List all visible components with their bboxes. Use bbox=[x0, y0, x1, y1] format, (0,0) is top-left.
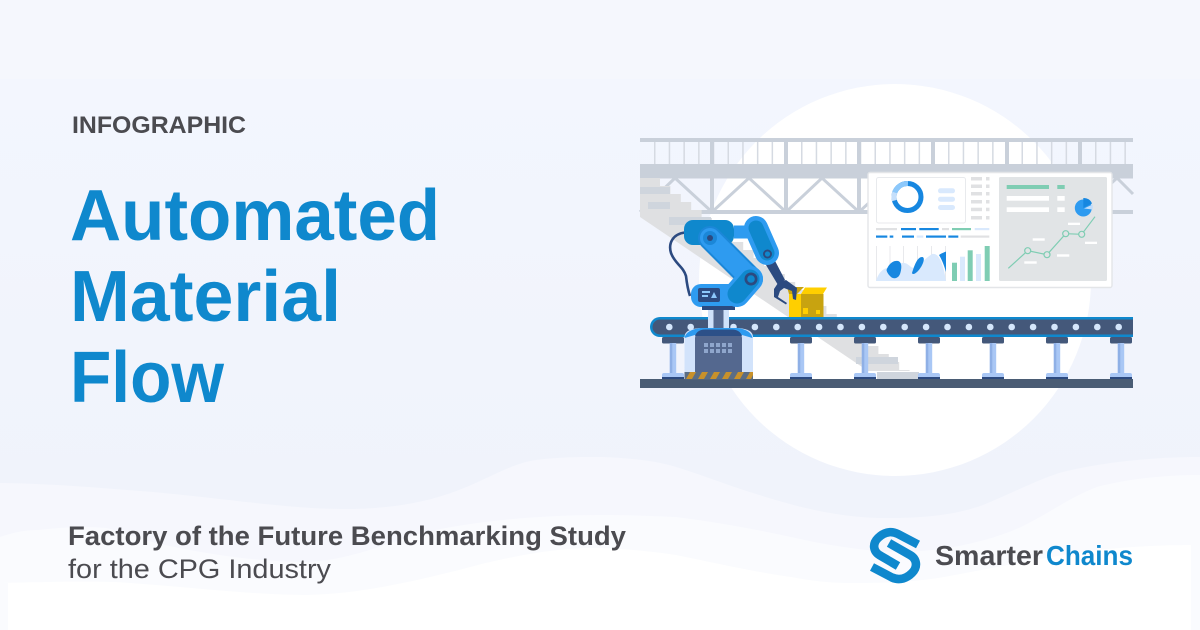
logo icon bbox=[872, 532, 918, 579]
title: Material bbox=[70, 257, 341, 337]
logo wordmark bbox=[935, 540, 1133, 571]
grey analytics panel bbox=[999, 177, 1107, 281]
donut card bbox=[876, 178, 966, 223]
conveyor legs bbox=[662, 337, 1132, 380]
shoulder bbox=[684, 220, 734, 245]
upper arm bbox=[703, 231, 751, 279]
title: Flow bbox=[70, 338, 225, 418]
beam bbox=[734, 226, 759, 238]
white circle behind illustration bbox=[699, 84, 1091, 476]
side list bbox=[971, 177, 990, 220]
title bbox=[70, 176, 440, 418]
title: Automated bbox=[70, 176, 440, 256]
label: infographic: INFOGRAPHIC bbox=[72, 112, 246, 139]
gripper bbox=[763, 257, 797, 304]
logo wordmark: Chains bbox=[1046, 540, 1133, 571]
conveyor belt bbox=[650, 317, 1133, 337]
subtitle: Factory of the Future Benchmarking Study bbox=[68, 521, 626, 551]
robot machine base bbox=[684, 305, 753, 380]
dashboard panel bbox=[640, 172, 1133, 579]
background waves bbox=[0, 457, 1200, 630]
base rail bbox=[640, 379, 1133, 388]
subtitle: for the CPG Industry bbox=[68, 554, 332, 584]
line chart bbox=[1008, 217, 1097, 268]
bar chart bbox=[952, 246, 990, 281]
legend lines bbox=[876, 228, 989, 238]
logo wordmark: Smarter bbox=[935, 540, 1043, 571]
robot cable bbox=[670, 232, 690, 296]
area chart bbox=[876, 246, 946, 281]
cardboard box bbox=[787, 287, 827, 318]
subtitle bbox=[68, 521, 626, 584]
illustration: grey staircase bbox=[640, 178, 919, 379]
lower arm bbox=[737, 272, 758, 294]
forearm bbox=[756, 228, 772, 258]
pie chart bbox=[1075, 198, 1093, 216]
illustration: factory truss bbox=[640, 138, 1133, 214]
robot base body bbox=[691, 284, 740, 310]
logo: SmarterChains bbox=[872, 532, 1133, 579]
robot arm bbox=[684, 220, 797, 310]
